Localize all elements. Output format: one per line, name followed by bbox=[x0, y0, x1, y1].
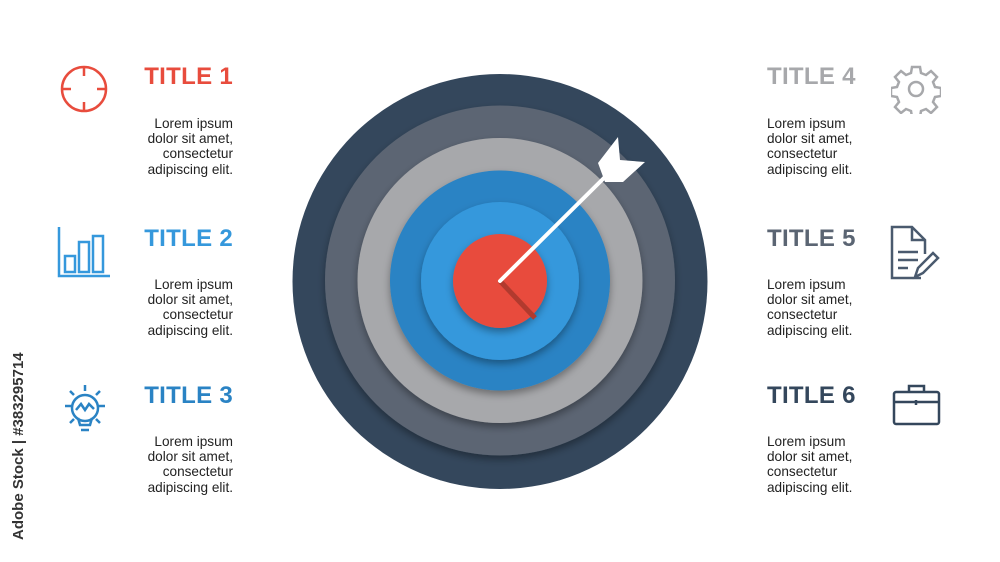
text 2: dolor sit amet, bbox=[148, 292, 233, 307]
text 1 bbox=[148, 116, 233, 177]
title 5: TITLE 5 bbox=[767, 225, 856, 252]
side watermark id: Adobe Stock | #383295714 bbox=[10, 352, 27, 540]
text 4: Lorem ipsum bbox=[767, 116, 846, 131]
text 3: Lorem ipsum bbox=[154, 434, 233, 449]
title 1: TITLE 1 bbox=[144, 63, 233, 90]
title 3: TITLE 3 bbox=[144, 382, 233, 409]
text 3 bbox=[148, 434, 233, 495]
text 1: dolor sit amet, bbox=[148, 131, 233, 146]
text 2: Lorem ipsum bbox=[154, 277, 233, 292]
text 6: adipiscing elit. bbox=[767, 480, 852, 495]
text 3: consectetur bbox=[163, 464, 233, 479]
icon: crosshair bbox=[60, 66, 108, 112]
title 6: TITLE 6 bbox=[767, 382, 856, 409]
text 4: consectetur bbox=[767, 146, 837, 161]
text 2 bbox=[148, 277, 233, 338]
text 1: consectetur bbox=[163, 146, 233, 161]
text 3: dolor sit amet, bbox=[148, 449, 233, 464]
title 4: TITLE 4 bbox=[767, 63, 856, 90]
text 1: adipiscing elit. bbox=[148, 162, 233, 177]
title 2: TITLE 2 bbox=[144, 225, 233, 252]
arrow bbox=[500, 137, 645, 318]
icon: briefcase bbox=[892, 384, 940, 426]
text 6: consectetur bbox=[767, 464, 837, 479]
icon: gear bbox=[891, 66, 941, 114]
text 4: adipiscing elit. bbox=[767, 162, 852, 177]
text 4: dolor sit amet, bbox=[767, 131, 852, 146]
text 2: consectetur bbox=[163, 307, 233, 322]
text 6 bbox=[767, 434, 852, 495]
text 2: adipiscing elit. bbox=[148, 323, 233, 338]
text 5: Lorem ipsum bbox=[767, 277, 846, 292]
icon: bar chart bbox=[58, 227, 110, 278]
icon: bulb bbox=[65, 385, 105, 432]
text 3: adipiscing elit. bbox=[148, 480, 233, 495]
text 5: dolor sit amet, bbox=[767, 292, 852, 307]
text 1: Lorem ipsum bbox=[154, 116, 233, 131]
text 5: adipiscing elit. bbox=[767, 323, 852, 338]
text 5: consectetur bbox=[767, 307, 837, 322]
icon: document bbox=[890, 226, 940, 280]
text 5 bbox=[767, 277, 852, 338]
text 6: Lorem ipsum bbox=[767, 434, 846, 449]
text 4 bbox=[767, 116, 852, 177]
text 6: dolor sit amet, bbox=[767, 449, 852, 464]
